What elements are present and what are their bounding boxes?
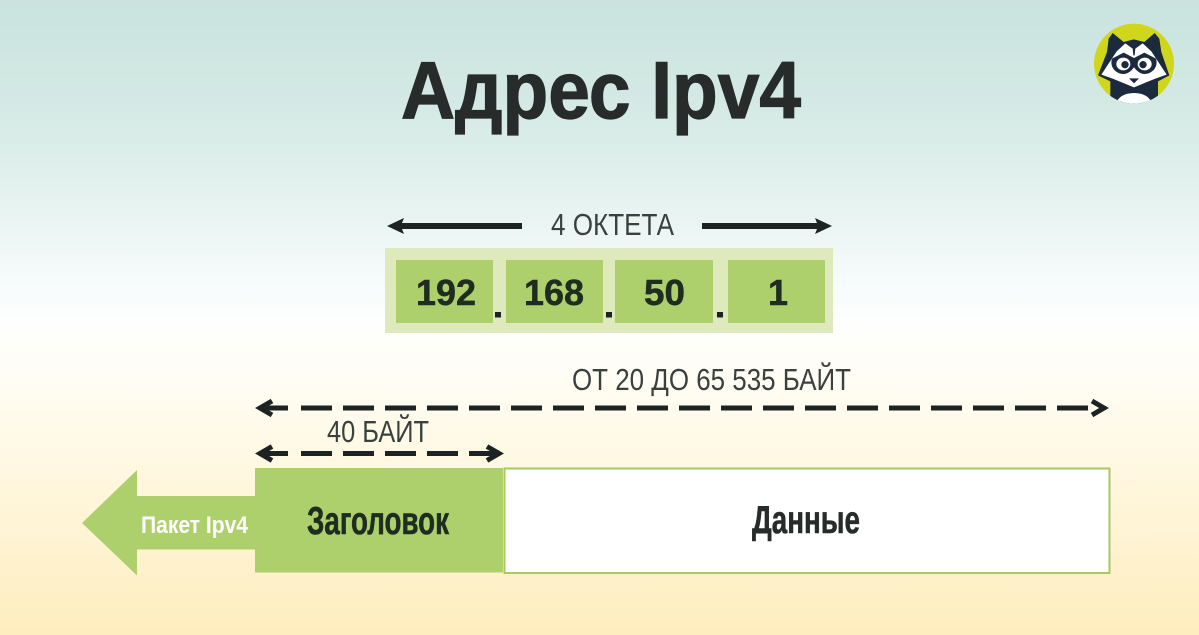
octet 50: 50 xyxy=(644,272,685,313)
separator dots xyxy=(495,312,723,318)
octet 168 xyxy=(506,260,603,323)
label: 40 bytes: 40 БАЙТ xyxy=(327,413,429,449)
octet 192: 192 xyxy=(416,272,476,313)
title: Адрес Ipv4 xyxy=(401,46,801,136)
label: total size: ОТ 20 ДО 65 535 БАЙТ xyxy=(572,361,851,397)
arrow label: Пакет Ipv4 xyxy=(141,512,249,539)
panel: IP address octets xyxy=(385,248,833,333)
arrow: header size dashed xyxy=(259,446,499,460)
icon: raccoon logo xyxy=(1094,24,1174,104)
arrow: left xyxy=(387,218,522,234)
label: 4 octets with arrows xyxy=(387,207,832,242)
panel background xyxy=(385,248,833,333)
octet 1: 1 xyxy=(768,272,788,313)
label text: 4 ОКТЕТА xyxy=(551,207,674,242)
panel: data block: Данные xyxy=(752,499,860,542)
octet 168: 168 xyxy=(524,272,584,313)
panel: data block xyxy=(504,468,1110,573)
octet 1 xyxy=(728,260,825,323)
panel: header block: Заголовок xyxy=(307,500,449,543)
octet 50 xyxy=(615,260,713,323)
arrow: packet Ipv4 xyxy=(82,470,256,576)
octet 192 xyxy=(396,260,493,323)
panel: header block xyxy=(255,468,503,572)
arrow: right xyxy=(702,218,832,234)
arrow: total size dashed xyxy=(259,401,1104,415)
